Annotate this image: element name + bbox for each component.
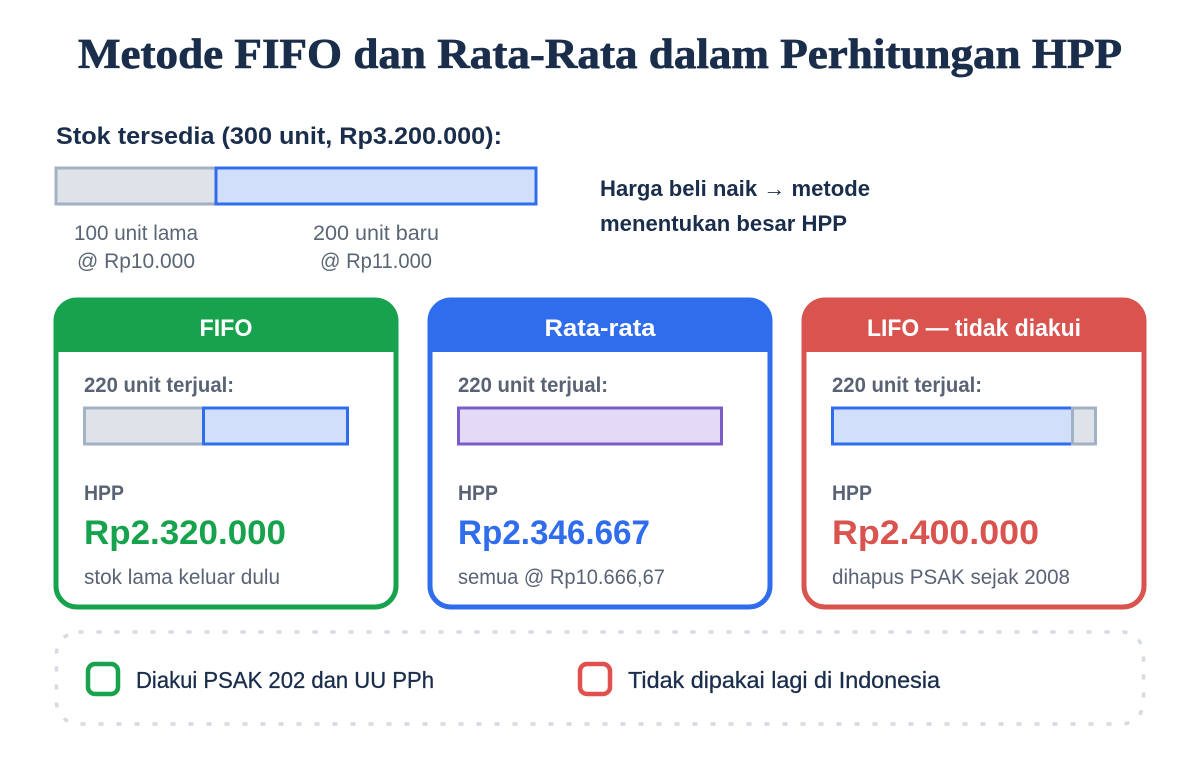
- LIFO value: Rp2.400.000: [832, 514, 1039, 552]
- legend: [56, 632, 1144, 724]
- stock heading: Stok tersedia (300 unit, Rp3.200.000):: [56, 123, 502, 150]
- LIFO units label: 220 unit terjual:: [832, 374, 982, 397]
- icon: green legend swatch: [88, 664, 118, 694]
- note on rising prices: Harga beli naik → metode: [600, 176, 870, 201]
- Rata-rata header label: Rata-rata: [544, 315, 656, 342]
- Rata-rata HPP label: HPP: [458, 482, 498, 505]
- FIFO header: [54, 298, 398, 352]
- stock label: new units: @ Rp11.000: [320, 250, 432, 273]
- FIFO header label: FIFO: [200, 315, 252, 342]
- stock label: new units: [313, 222, 439, 273]
- panel: FIFO: [54, 298, 398, 607]
- LIFO header: [802, 298, 1146, 352]
- LIFO note: dihapus PSAK sejak 2008: [832, 566, 1070, 589]
- legend text: recognised: Diakui PSAK 202 dan UU PPh: [136, 667, 434, 693]
- LIFO header label: LIFO — tidak diakui: [867, 315, 1081, 342]
- title: Metode FIFO dan Rata-Rata dalam Perhitungan HPP: [78, 32, 1122, 78]
- stock bar: [56, 168, 536, 204]
- stock label: old units: @ Rp10.000: [77, 250, 195, 273]
- FIFO value: Rp2.320.000: [84, 514, 286, 552]
- stock label: old units: 100 unit lama: [74, 222, 198, 245]
- FIFO units label: 220 unit terjual:: [84, 374, 234, 397]
- Rata-rata bar: [458, 408, 722, 444]
- icon: red legend swatch: [580, 664, 610, 694]
- panel: Rata-rata: [428, 298, 772, 607]
- FIFO note: stok lama keluar dulu: [84, 566, 280, 589]
- FIFO bar: [84, 408, 348, 444]
- stock label: new units: 200 unit baru: [313, 222, 439, 245]
- Rata-rata value: Rp2.346.667: [458, 514, 650, 552]
- Rata-rata units label: 220 unit terjual:: [458, 374, 608, 397]
- Rata-rata header: [428, 298, 772, 352]
- panel: LIFO: [802, 298, 1146, 607]
- legend text: no longer used: Tidak dipakai lagi di Indonesia: [628, 667, 940, 693]
- note on rising prices: menentukan besar HPP: [600, 211, 847, 236]
- FIFO HPP label: HPP: [84, 482, 124, 505]
- Rata-rata note: semua @ Rp10.666,67: [458, 566, 665, 589]
- note on rising prices: [600, 176, 870, 236]
- stock label: old units: [74, 222, 198, 273]
- LIFO HPP label: HPP: [832, 482, 872, 505]
- LIFO bar: [832, 408, 1096, 444]
